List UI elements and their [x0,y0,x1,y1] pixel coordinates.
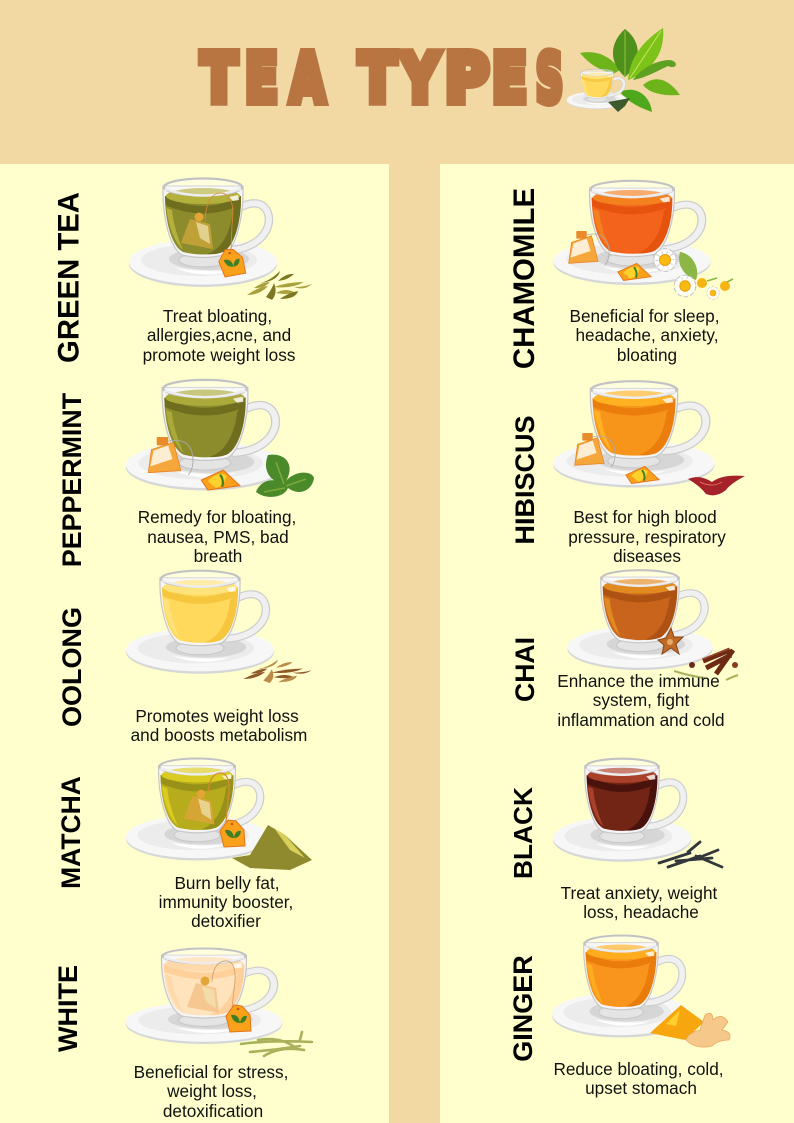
description: and boosts metabolism [131,725,307,745]
tea card: black [508,759,722,922]
description: inflammation and cold [557,710,725,730]
title: T [201,40,237,118]
label: hibiscus: HIBISCUS [510,415,540,545]
label: black: BLACK [508,787,538,879]
description: promote weight loss [143,345,295,365]
label: green tea: GREEN TEA [52,192,86,363]
description: detoxifier [191,911,261,931]
icon: white tea cup [126,949,312,1056]
title: E [492,40,527,118]
tea card: matcha [56,759,312,931]
icon: hibiscus cup [553,381,745,495]
description: pressure, respiratory [568,527,726,547]
description: Treat bloating, [163,306,272,326]
description: Remedy for bloating, [138,507,296,527]
description: system, fight [593,690,689,710]
label: white: WHITE [53,965,83,1052]
label: oolong: OOLONG [57,607,87,727]
description: Treat anxiety, weight [561,883,718,903]
icon: ginger cup [552,936,730,1047]
tea card: chai [510,570,738,730]
tea card: chamomile [508,181,733,369]
description: headache, anxiety, [575,325,719,345]
tea card: green tea [52,178,312,365]
description: Promotes weight loss [135,706,299,726]
icon: title tea cup with leaves [567,28,680,112]
tea card: ginger [508,936,730,1098]
description: Burn belly fat, [174,873,280,893]
title: Y [400,40,440,118]
description: Enhance the immune [557,671,720,691]
label: peppermint: PEPPERMINT [57,392,87,567]
icon: chai cup [567,570,738,680]
description: detoxification [163,1101,263,1121]
tea card: hibiscus [510,381,745,566]
description: diseases [613,546,681,566]
label: chai: CHAI [510,637,540,702]
icon: oolong cup [126,571,312,683]
description: nausea, PMS, bad [147,527,289,547]
description: breath [194,546,242,566]
tea card: white [53,949,312,1121]
panel: right column [440,164,794,1123]
description: allergies,acne, and [147,325,291,345]
icon: peppermint cup [126,380,314,497]
description: upset stomach [585,1078,697,1098]
icon: black tea cup [553,759,722,867]
description: bloating [617,345,677,365]
panel: left column [0,164,389,1123]
page background gutter [389,164,440,1123]
title: S [536,40,563,118]
icon: matcha cup [126,759,312,870]
title: A [290,40,325,118]
label: chamomile: CHAMOMILE [508,188,541,369]
description: weight loss, [166,1081,257,1101]
tea card: oolong [57,571,312,745]
description: Best for high blood [573,507,717,527]
description: immunity booster, [159,892,293,912]
description: Reduce bloating, cold, [553,1059,724,1079]
title: T [359,40,396,118]
description: Beneficial for stress, [134,1062,288,1082]
icon: green tea cup [129,178,312,300]
header band [0,0,794,164]
icon: chamomile cup [554,181,733,298]
title: P [445,40,489,118]
description: loss, headache [583,902,699,922]
tea card: peppermint [57,380,314,567]
label: ginger: GINGER [508,955,538,1062]
label: matcha: MATCHA [56,776,86,889]
description: Beneficial for sleep, [570,306,720,326]
title: E [245,40,278,118]
